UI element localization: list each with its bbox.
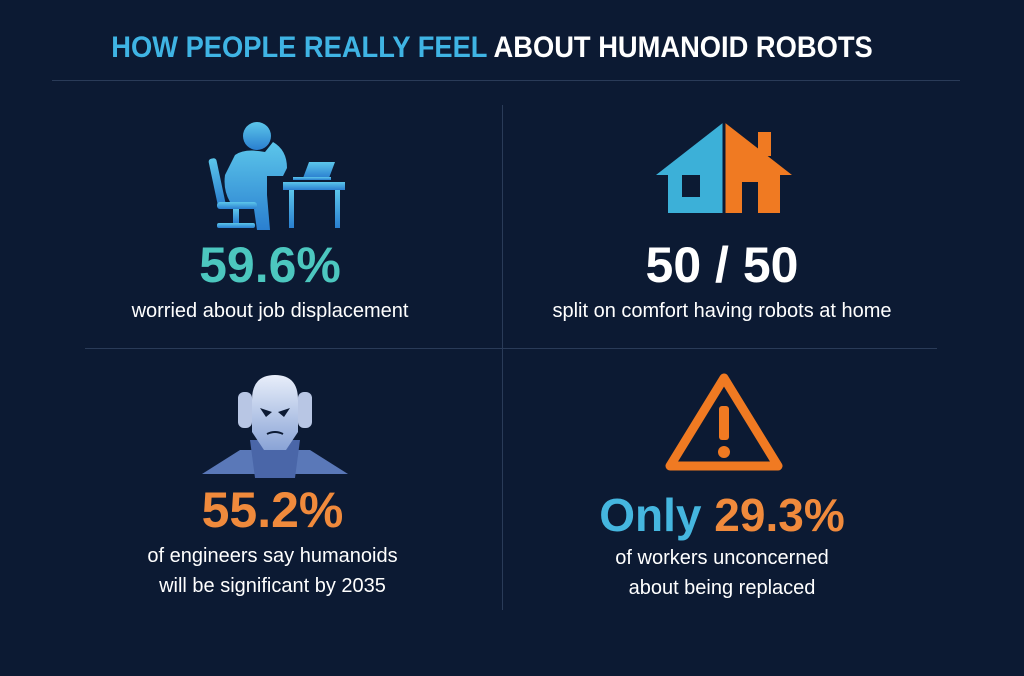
stat: 55.2%: 55.2% [202,482,343,538]
text: engineers say humanoids [147,545,398,597]
icon: split house [656,123,792,213]
text: workers unconcerned: of workers unconcerned [615,547,829,569]
panel: engineers [147,375,398,597]
panel: robots at home [552,123,892,322]
text: engineers say humanoids: will be significant by 2035 [159,575,386,597]
panel: job displacement [132,122,408,322]
text: workers unconcerned: about being replaced [629,577,815,599]
text: split on comfort: split on comfort having robots at home [552,300,892,322]
text: engineers say humanoids: of engineers say humanoids [147,545,398,567]
stat: Only 29.3%: Only 29.3% [599,489,845,541]
stat: 50 / 50: 50 / 50 [646,237,798,293]
panel: workers unconcerned [599,374,845,599]
text: workers unconcerned [615,547,829,599]
title: HOW PEOPLE REALLY FEEL ABOUT HUMANOID ROBOTS [111,31,873,64]
stat: 59.6%: 59.6% [199,237,341,293]
icon: warning triangle [666,374,782,470]
icon: worried person at desk [208,122,345,230]
icon: robot head [202,375,348,478]
text: worried about job displacement: worried about job displacement [132,300,408,322]
